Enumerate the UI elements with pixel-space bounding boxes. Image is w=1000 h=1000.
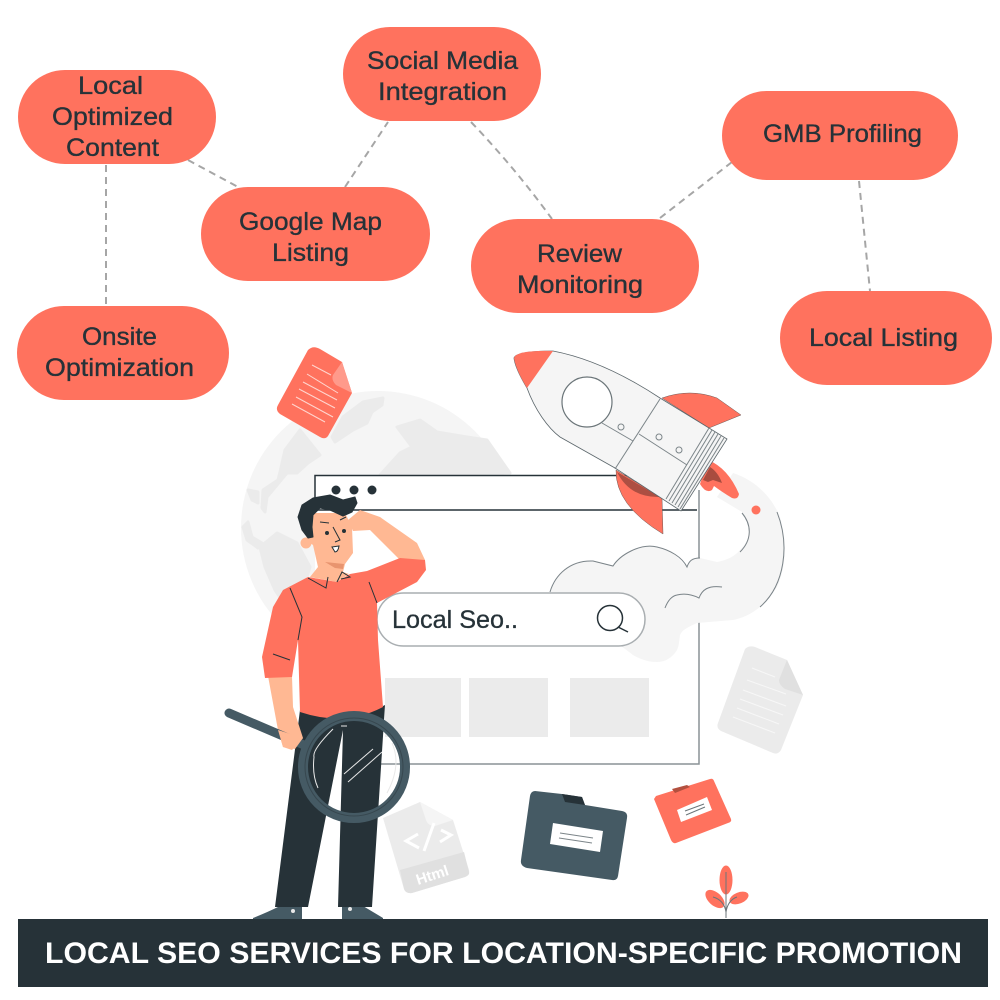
node: Review Monitoring: Review	[537, 240, 623, 268]
facial features	[273, 517, 377, 660]
dark folder	[521, 791, 627, 880]
node: Social Media Integration	[343, 27, 541, 121]
globe	[241, 391, 515, 665]
hair	[298, 495, 357, 538]
rocket	[514, 351, 741, 534]
node: Google Map Listing	[201, 187, 430, 281]
top fin	[662, 393, 741, 428]
orange folder	[654, 779, 731, 843]
neck shade	[325, 562, 344, 569]
node: Local Listing	[780, 291, 992, 385]
node: Social Media Integration: Social Media	[367, 47, 518, 75]
title banner: LOCAL SEO SERVICES FOR LOCATION-SPECIFIC PROMOTION	[45, 937, 962, 970]
title banner	[18, 919, 988, 987]
person	[229, 495, 426, 919]
porthole	[562, 377, 612, 427]
node: GMB Profiling: GMB Profiling	[763, 120, 922, 148]
browser window	[315, 475, 699, 764]
lower fin	[616, 470, 663, 534]
search bar: Local Seo..	[392, 606, 518, 634]
html document	[383, 802, 469, 893]
magnifier	[229, 713, 405, 818]
node: Onsite Optimization: Optimization	[45, 354, 194, 382]
ear	[300, 538, 312, 548]
node: Google Map Listing: Listing	[272, 239, 349, 267]
left forearm	[268, 676, 303, 750]
node: Onsite Optimization	[17, 306, 229, 400]
face	[306, 513, 353, 582]
smoke trail	[550, 473, 785, 662]
icon: search	[598, 606, 628, 632]
node: Onsite Optimization: Onsite	[82, 323, 157, 351]
orange document	[277, 347, 352, 438]
node: Review Monitoring	[471, 219, 699, 313]
node: Local Optimized Content: Optimized	[52, 103, 173, 131]
node: Local Optimized Content: Content	[66, 134, 159, 162]
node: Social Media Integration: Integration	[378, 78, 507, 106]
node: Local Optimized Content	[18, 70, 216, 164]
node: GMB Profiling	[722, 91, 958, 180]
html document: Html	[414, 862, 451, 889]
window dots	[332, 486, 376, 494]
shirt	[262, 558, 426, 718]
raised forearm and hand	[348, 510, 425, 560]
node: Local Optimized Content: Local	[78, 72, 143, 100]
flame	[700, 460, 739, 498]
smoke dot	[752, 506, 760, 514]
gray document	[717, 646, 803, 754]
node: Google Map Listing: Google Map	[239, 208, 382, 236]
plant	[702, 866, 750, 918]
content tiles	[385, 678, 649, 737]
node: Local Listing: Local Listing	[809, 324, 958, 352]
trousers	[275, 705, 385, 907]
nose	[514, 351, 553, 388]
shoes	[253, 906, 383, 919]
rocket body	[514, 351, 727, 511]
node: Review Monitoring: Monitoring	[517, 271, 643, 299]
search bar	[377, 593, 645, 646]
